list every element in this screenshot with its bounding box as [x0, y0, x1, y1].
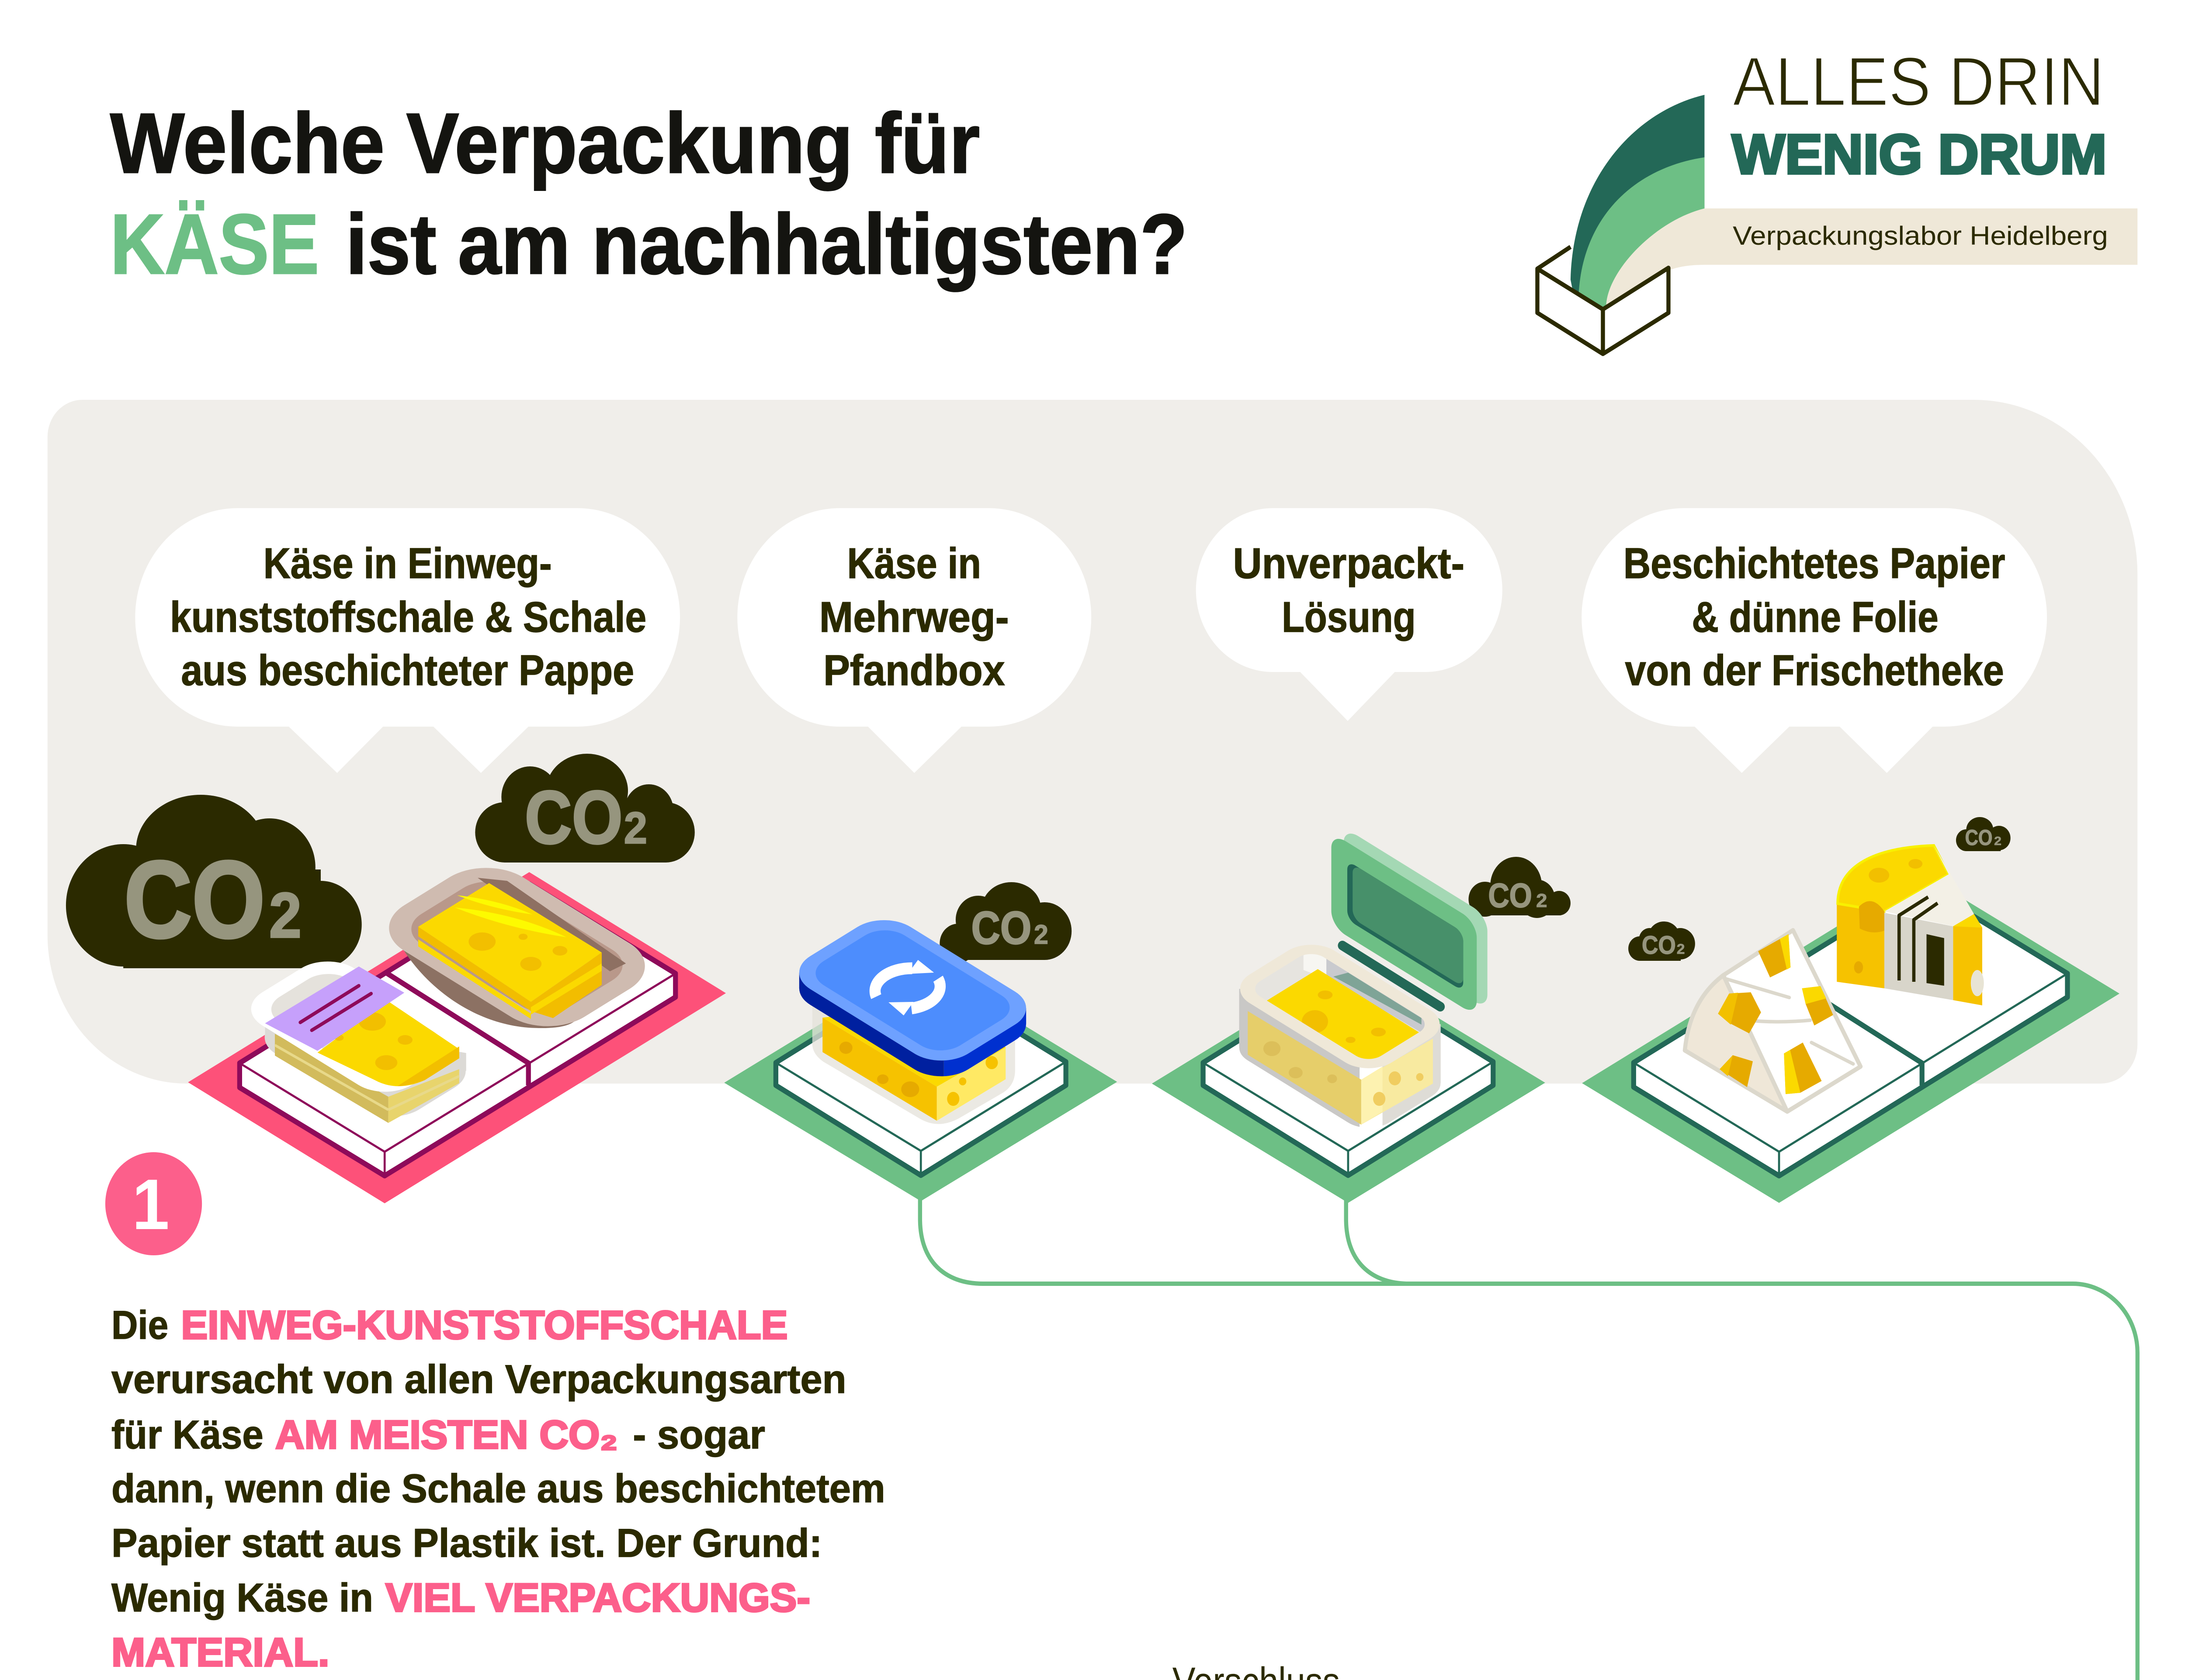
CO2 cloud: reusable box	[940, 882, 1072, 963]
CO2 cloud: unpackaged	[1469, 857, 1571, 918]
speech bubble: Einweg: Käse in Einweg-	[264, 540, 552, 588]
CO2 cloud: reusable box: CO	[971, 902, 1031, 954]
logo: Alles drin wenig drum	[1537, 43, 2137, 354]
icon: open lid	[1331, 827, 1488, 1016]
CO2 cloud: second: CO	[525, 776, 623, 859]
logo: Alles drin wenig drum: Verpackungslabor Heidelberg	[1733, 221, 2108, 250]
speech bubble: Mehrweg: Mehrweg-	[819, 593, 1009, 641]
CO2 cloud: small right	[1956, 817, 2011, 851]
CO2 cloud: small right: 2	[1994, 834, 2001, 848]
CO2 cloud: large	[66, 795, 362, 968]
CO2 cloud: small left: CO	[1642, 931, 1676, 959]
icon: reusable deposit box	[799, 920, 1026, 1124]
connector lines	[920, 1199, 2137, 1680]
CO2 cloud: reusable box: 2	[1034, 919, 1048, 949]
speech bubble: Frischetheke: & dünne Folie	[1692, 593, 1939, 641]
icon: cheese wrapped in coated paper	[1685, 930, 1861, 1112]
platform: reusable box	[724, 963, 1117, 1201]
speech bubble: Einweg	[135, 508, 680, 773]
text block: explanation: dann, wenn die Schale aus beschichtetem	[111, 1465, 885, 1511]
number badge	[105, 1152, 202, 1255]
text block: explanation: Papier statt aus Plastik ist. Der Grund:	[111, 1520, 822, 1566]
speech bubble: Unverpackt: Lösung	[1282, 593, 1416, 641]
panel: grey background	[48, 400, 2137, 1084]
speech bubble: Mehrweg	[737, 508, 1091, 773]
speech bubble: Unverpackt: Unverpackt-	[1233, 540, 1464, 588]
CO2 cloud: small left	[1628, 921, 1695, 961]
speech bubble: Unverpackt	[1196, 508, 1502, 721]
CO2 cloud: second	[475, 754, 695, 863]
icon: coated cardboard tray with cheese	[368, 855, 666, 1039]
text block: explanation: Die	[111, 1302, 168, 1347]
icon: wedge of cheese in thin film	[1837, 845, 1984, 1005]
speech bubble: Einweg: aus beschichteter Pappe	[181, 647, 634, 695]
text block: explanation: VIEL VERPACKUNGS-	[385, 1575, 810, 1620]
text block: explanation: Wenig Käse in	[111, 1575, 373, 1620]
speech bubble: Frischetheke: von der Frischetheke	[1625, 647, 2004, 695]
text block: explanation: MATERIAL.	[111, 1629, 329, 1675]
CO2 cloud: second: 2	[624, 803, 647, 853]
number badge: 1	[132, 1164, 170, 1244]
icon: clear plastic tray with cheese	[236, 952, 481, 1126]
speech bubble: Einweg: kunststoffschale & Schale	[170, 593, 646, 641]
icon: recycling arrows	[875, 960, 940, 1015]
logo: Alles drin wenig drum: ALLES DRIN	[1733, 43, 2104, 120]
platform: pink	[188, 872, 726, 1203]
speech bubble: Frischetheke: Beschichtetes Papier	[1623, 540, 2005, 588]
title: KÄSE	[110, 197, 319, 292]
text block: explanation: für Käse	[111, 1412, 264, 1457]
speech bubble: Mehrweg: Käse in	[847, 540, 981, 588]
CO2 cloud: unpackaged: CO	[1488, 877, 1532, 915]
speech bubble: Mehrweg: Pfandbox	[823, 647, 1005, 695]
text block: explanation: EINWEG-KUNSTSTOFFSCHALE	[181, 1302, 788, 1347]
title: Welche Verpackung für	[110, 96, 980, 191]
text block: explanation: - sogar	[633, 1412, 765, 1457]
platform: deli counter	[1582, 874, 2119, 1203]
icon: open container with cheese	[1239, 945, 1441, 1127]
CO2 cloud: large: CO	[124, 839, 265, 961]
CO2 cloud: unpackaged: 2	[1536, 890, 1547, 911]
speech bubble: Frischetheke	[1582, 508, 2047, 773]
title	[110, 96, 1187, 292]
title: ist am nachhaltigsten?	[346, 197, 1187, 292]
CO2 cloud: large: 2	[269, 880, 302, 951]
text block: explanation: verursacht von allen Verpackungsarten	[111, 1356, 846, 1402]
text block: explanation	[111, 1302, 885, 1675]
CO2 cloud: small left: 2	[1677, 941, 1685, 957]
platform: unpackaged	[1152, 963, 1545, 1203]
icon: purple label	[265, 966, 404, 1051]
icon: blue lid	[799, 920, 1026, 1077]
CO2 cloud: small right: CO	[1965, 826, 1992, 850]
text block: explanation: AM MEISTEN CO₂	[275, 1412, 618, 1457]
logo: Alles drin wenig drum: WENIG DRUM	[1732, 123, 2107, 186]
